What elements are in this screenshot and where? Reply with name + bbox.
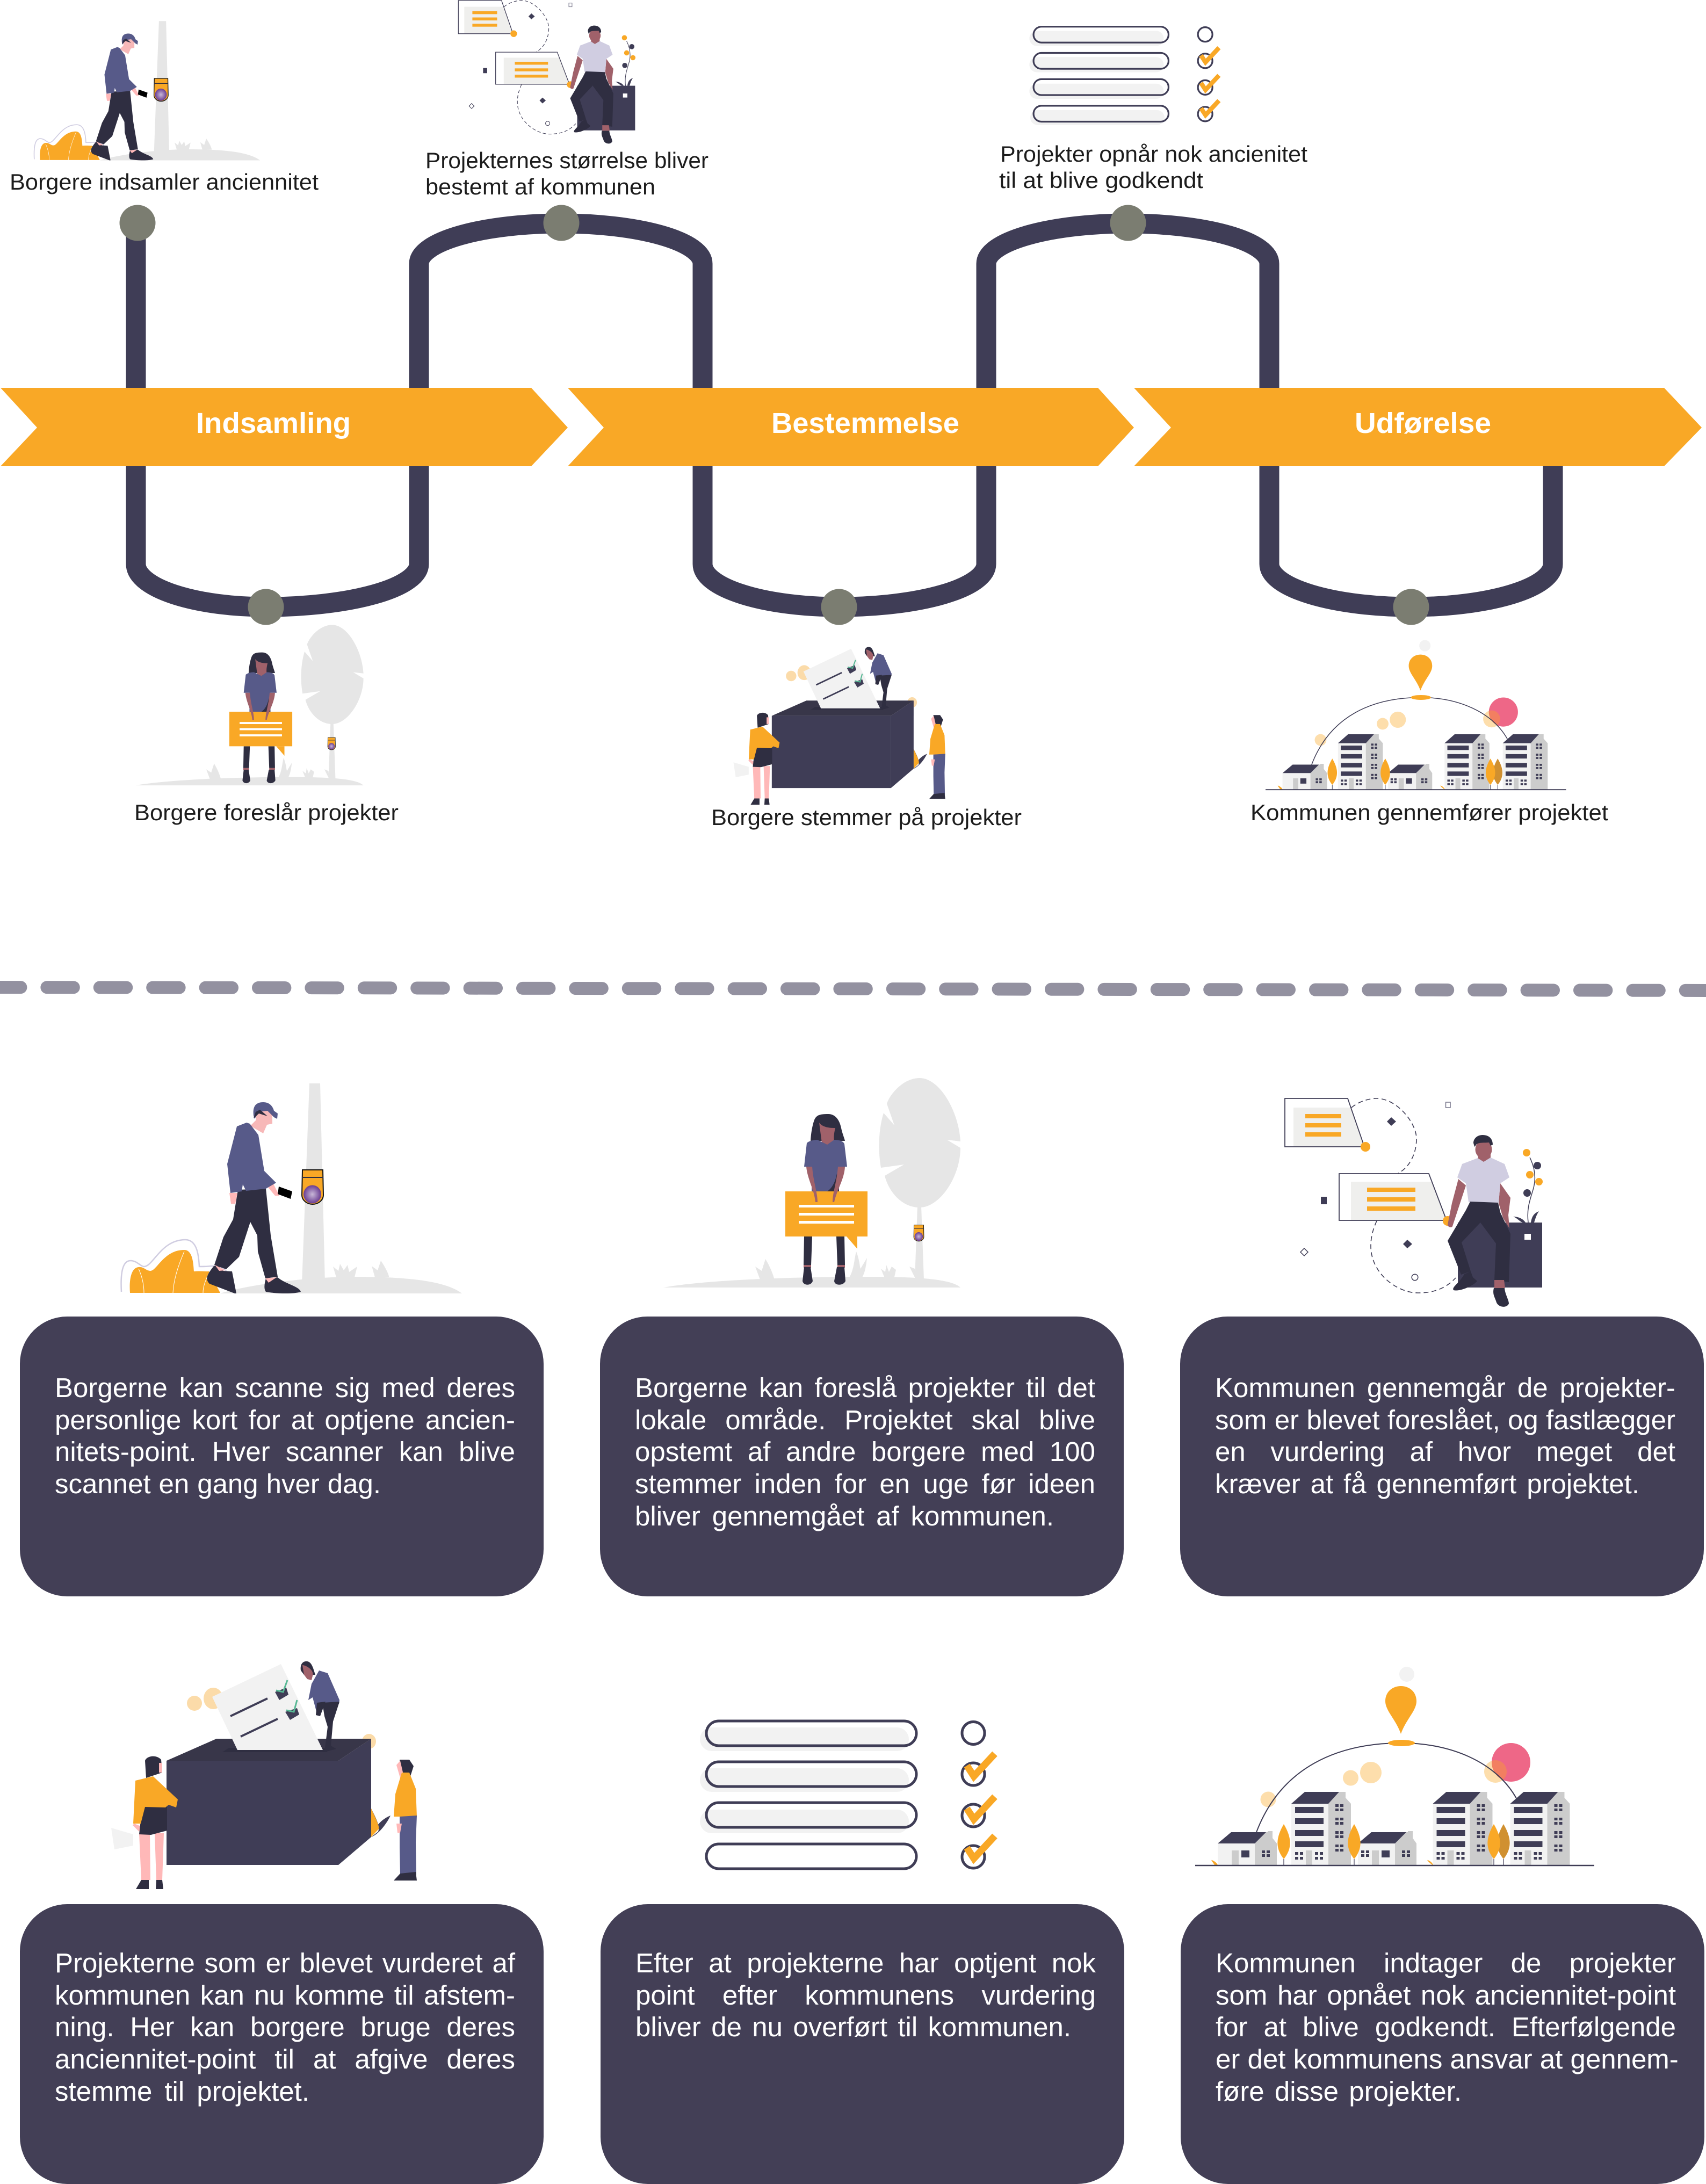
trees xyxy=(1211,1824,1510,1865)
caption: step 2: Borgere foreslår projekter xyxy=(134,800,399,825)
figure: man on box xyxy=(301,1661,339,1752)
card: scanning xyxy=(20,1317,544,1596)
illustration: man scanning card (small) xyxy=(27,21,260,161)
caption: step 6: Kommunen gennemfører projektet xyxy=(1250,800,1608,825)
building: tower 3 xyxy=(1510,1792,1570,1865)
card text: Efter at projekterne har optjent nok xyxy=(635,1948,1096,1978)
card text: føre disse projekter. xyxy=(1216,2076,1462,2107)
caption: step 4: Borgere stemmer på projekter xyxy=(711,805,1022,830)
heading: Udførelse: Udførelse xyxy=(1355,407,1491,439)
card text: Projekterne som er blevet vurderet af xyxy=(55,1948,515,1978)
building: tower 1 xyxy=(1291,1792,1351,1865)
card text: er det kommunens ansvar at gennem- xyxy=(1216,2044,1679,2074)
arrow: Bestemmelse xyxy=(568,388,1134,466)
card text: Borgerne kan foreslå projekter til det xyxy=(635,1372,1095,1403)
figure: woman xyxy=(111,1756,178,1889)
timeline nodes xyxy=(119,205,1429,625)
figure: man standing xyxy=(394,1760,417,1881)
card text: nitets-point. Hver scanner kan blive xyxy=(55,1436,515,1467)
card text: som er blevet foreslået, og fastlægger xyxy=(1215,1405,1675,1435)
card text: stemme til projektet. xyxy=(55,2076,309,2107)
illustration: checklist (small) xyxy=(1029,27,1219,125)
building: tower 2 xyxy=(1433,1792,1492,1865)
illustration: city with location pin (small) xyxy=(1266,640,1566,790)
card text: Kommunen indtager de projekter xyxy=(1216,1948,1676,1978)
card: transfer to municipality xyxy=(601,1904,1124,2184)
card text xyxy=(55,1372,515,1499)
card text: lokale område. Projektet skal blive xyxy=(635,1405,1095,1435)
card text: anciennitet-point til at afgive deres xyxy=(55,2044,515,2074)
card text: kommunen kan nu komme til afstem- xyxy=(55,1980,515,2011)
card text: opstemt af andre borgere med 100 xyxy=(635,1436,1095,1467)
card text xyxy=(1216,1948,1679,2107)
dashed divider xyxy=(0,987,1706,990)
document 2 xyxy=(1339,1174,1452,1226)
caption: step 5: til at blive godkendt xyxy=(999,168,1203,193)
icon: small scanner xyxy=(914,1225,924,1241)
illustration: seated man with documents (small) xyxy=(458,1,635,143)
card text: Kommunen gennemgår de projekter- xyxy=(1215,1372,1675,1403)
building: house 2 xyxy=(1358,1831,1416,1865)
card text xyxy=(635,1372,1095,1531)
illustration: city with location pin (large) xyxy=(1195,1667,1594,1865)
illustration: woman holding proposal (small) xyxy=(136,625,364,785)
heading: Indsamling: Indsamling xyxy=(196,407,351,439)
caption: step 5 xyxy=(999,141,1307,193)
card text: bliver gennemgået af kommunen. xyxy=(635,1501,1054,1531)
illustration: woman holding proposal (large) xyxy=(663,1078,960,1288)
illustration: voting at ballot box (large) xyxy=(111,1661,417,1889)
illustration: checklist (large) xyxy=(700,1721,995,1869)
arrow: Udførelse xyxy=(1134,388,1702,466)
heading: Bestemmelse: Bestemmelse xyxy=(771,407,959,439)
card text: personlige kort for at optjene ancien- xyxy=(55,1405,515,1435)
card text: stemmer inden for en uge før ideen xyxy=(635,1469,1095,1499)
icon: scanner xyxy=(302,1170,323,1204)
card: voting xyxy=(20,1904,544,2184)
icon: proposal sign xyxy=(785,1191,868,1249)
card: implementation xyxy=(1181,1904,1704,2184)
figure: walking man xyxy=(207,1102,301,1293)
illustration: seated man with documents (large) xyxy=(1285,1098,1543,1307)
timeline track xyxy=(136,223,1553,607)
caption: step 3 xyxy=(425,148,709,199)
card text: bliver de nu overført til kommunen. xyxy=(635,2012,1071,2042)
card: proposing xyxy=(600,1317,1124,1596)
card text xyxy=(55,1948,516,2107)
card text: ning. Her kan borgere bruge deres xyxy=(55,2012,515,2042)
ballot paper xyxy=(212,1664,323,1750)
card text: point efter kommunens vurdering xyxy=(635,1980,1096,2011)
card text: kræver at få gennemført projektet. xyxy=(1215,1469,1639,1499)
card: municipal review xyxy=(1180,1317,1704,1596)
card text: scannet en gang hver dag. xyxy=(55,1469,381,1499)
figure: seated man xyxy=(1448,1135,1510,1307)
icon: location pin xyxy=(1385,1686,1416,1746)
caption: step 5: Projekter opnår nok ancienitet xyxy=(1000,141,1307,167)
caption: step 3: Projekternes størrelse bliver xyxy=(425,148,709,173)
ballot box xyxy=(167,1739,371,1865)
document 1 xyxy=(1285,1098,1370,1152)
card text xyxy=(635,1948,1096,2042)
card text xyxy=(1215,1372,1675,1499)
caption: step 3: bestemt af kommunen xyxy=(425,174,655,199)
card text: en vurdering af hvor meget det xyxy=(1215,1436,1675,1467)
card text: som har opnået nok anciennitet-point xyxy=(1216,1980,1676,2011)
arrow: Indsamling xyxy=(1,388,568,466)
building: house 1 xyxy=(1218,1831,1277,1865)
card text: for at blive godkendt. Efterfølgende xyxy=(1216,2012,1676,2042)
card text: Borgerne kan scanne sig med deres xyxy=(55,1372,515,1403)
illustration: man scanning card (large) xyxy=(111,1083,462,1293)
figure: woman xyxy=(785,1114,868,1285)
caption: step 1: Borgere indsamler anciennitet xyxy=(10,169,319,194)
illustration: voting at ballot box (small) xyxy=(733,647,945,805)
